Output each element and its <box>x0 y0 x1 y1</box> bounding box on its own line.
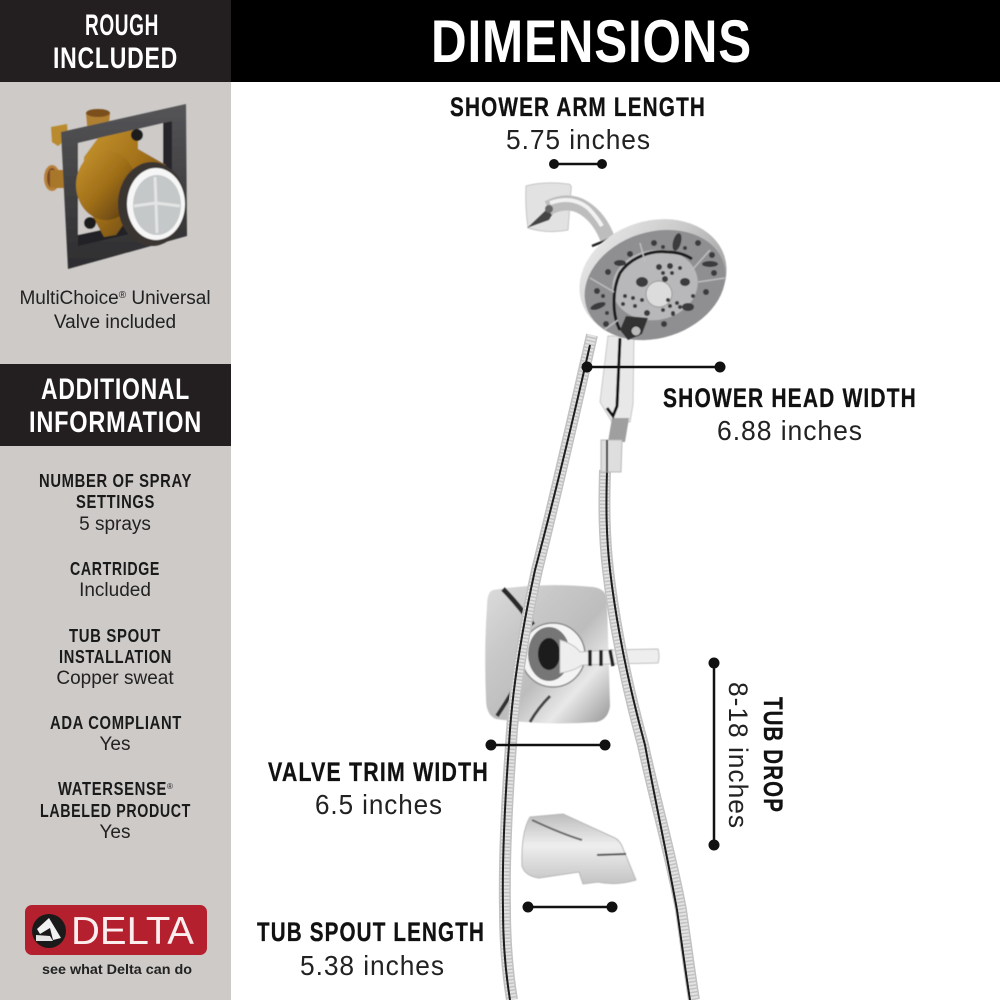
label: shower arm length: SHOWER ARM LENGTH <box>450 92 706 122</box>
info: watersense: Yes <box>100 822 130 843</box>
image: rough-in valve <box>44 104 187 269</box>
image: shower arm and flange <box>526 183 612 246</box>
label: tub spout length <box>257 917 485 981</box>
info: ada compliant: ADA COMPLIANT <box>50 713 182 733</box>
label: shower arm length <box>450 92 706 155</box>
label: tub drop <box>723 682 788 829</box>
header: additional information <box>0 364 231 446</box>
header: rough included <box>0 0 231 82</box>
dimension line: valve trim <box>486 740 610 750</box>
label: tub spout length: TUB SPOUT LENGTH <box>257 917 485 947</box>
image: shower head <box>564 201 742 358</box>
dimension line: tub drop <box>708 658 720 850</box>
label: shower arm length: 5.75 inches <box>506 124 651 155</box>
label: shower head width: SHOWER HEAD WIDTH <box>663 383 917 413</box>
logo: delta: see what Delta can do <box>42 961 192 977</box>
info: watersense: WATERSENSE <box>58 779 167 799</box>
dimension line: shower arm <box>549 159 607 169</box>
dimension line: tub spout <box>522 902 618 912</box>
info: spray settings: SETTINGS <box>76 492 155 512</box>
hose: left <box>503 335 592 1000</box>
icon: tub spout <box>522 814 636 884</box>
info: cartridge <box>70 559 160 601</box>
info: tub spout installation: Copper sweat <box>56 668 174 689</box>
logo: delta <box>25 905 207 977</box>
caption: valve included: Valve included <box>54 312 176 333</box>
label: tub spout length: 5.38 inches <box>300 950 445 981</box>
dimension line: shower head <box>582 362 726 372</box>
info: spray settings: NUMBER OF SPRAY <box>39 471 192 491</box>
label: tub drop: 8-18 inches <box>723 682 753 829</box>
label: valve trim width <box>268 757 489 820</box>
header: rough included: ROUGH <box>85 9 159 42</box>
label: shower head width: 6.88 inches <box>717 415 863 446</box>
info: tub spout installation: TUB SPOUT <box>69 626 161 646</box>
info: ada compliant <box>50 713 182 755</box>
title banner: dimensions: DIMENSIONS <box>431 8 752 75</box>
header: additional information: ADDITIONAL <box>41 373 190 406</box>
label: valve trim width: VALVE TRIM WIDTH <box>268 757 489 787</box>
title banner: dimensions <box>231 0 1000 82</box>
image: handheld wand <box>600 336 634 472</box>
header: additional information: INFORMATION <box>29 406 202 439</box>
label: tub drop: TUB DROP <box>758 697 788 813</box>
caption: valve included: ® <box>119 290 127 301</box>
logo: delta: DELTA <box>71 910 194 953</box>
info: watersense: LABELED PRODUCT <box>40 801 191 821</box>
info: cartridge: CARTRIDGE <box>70 559 160 579</box>
label: valve trim width: 6.5 inches <box>315 789 443 820</box>
info: tub spout installation: INSTALLATION <box>59 647 172 667</box>
info: watersense <box>40 779 191 843</box>
label: shower head width <box>663 383 917 446</box>
caption: valve included <box>19 288 211 333</box>
info: watersense: ® <box>167 782 173 791</box>
caption: valve included: MultiChoice <box>19 288 119 309</box>
hose: right <box>604 470 694 1000</box>
caption: valve included: Universal <box>126 288 211 309</box>
header: rough included: INCLUDED <box>53 42 178 75</box>
info: spray settings <box>39 471 192 535</box>
info: ada compliant: Yes <box>100 734 130 755</box>
info: cartridge: Included <box>79 580 151 601</box>
icon: valve trim plate <box>485 585 659 723</box>
info: spray settings: 5 sprays <box>79 514 151 535</box>
panel: sidebar background <box>0 0 231 1000</box>
info: tub spout installation <box>56 626 174 689</box>
